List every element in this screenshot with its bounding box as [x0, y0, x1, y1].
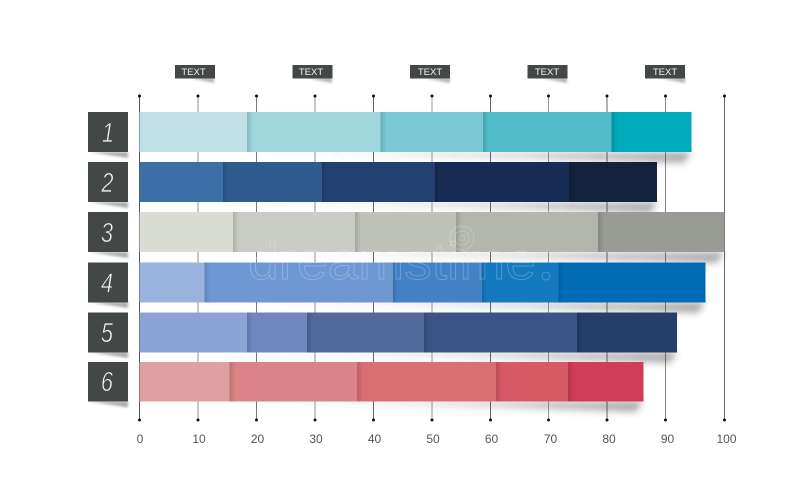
- bar row 3: [140, 212, 724, 252]
- x axis labels: 20: [251, 432, 264, 446]
- chart grid: axis lines and dots: [138, 94, 726, 422]
- x axis labels: 0: [137, 432, 144, 446]
- x axis labels: 30: [309, 432, 323, 446]
- x axis labels: 100: [716, 432, 737, 446]
- row number labels: 3: [101, 217, 113, 249]
- top tag labels: TEXT: [535, 67, 559, 78]
- bar row 4: [140, 262, 706, 302]
- row number labels: 1: [102, 117, 114, 149]
- top tag labels: [175, 65, 685, 83]
- x axis labels: 70: [544, 432, 557, 446]
- row number labels: [88, 112, 128, 408]
- x axis labels: 40: [368, 432, 381, 446]
- bar row 6: [140, 362, 644, 402]
- row number labels: 6: [101, 366, 113, 398]
- row number labels: 2: [101, 167, 114, 199]
- row number labels: 4: [101, 268, 113, 299]
- top tag labels: TEXT: [181, 67, 206, 78]
- x axis labels: 90: [661, 432, 674, 446]
- bar shadows: [250, 152, 724, 412]
- x axis labels: 50: [426, 432, 440, 446]
- x axis labels: 10: [192, 432, 206, 446]
- top tag labels: TEXT: [653, 67, 677, 78]
- bar row 1: [140, 112, 692, 152]
- row number labels: 5: [101, 317, 114, 349]
- x axis labels: 80: [602, 432, 616, 446]
- top tag labels: TEXT: [299, 67, 323, 78]
- x axis labels: [137, 432, 737, 446]
- x axis labels: 60: [485, 432, 498, 446]
- bar row 2: [140, 162, 657, 202]
- watermark: dreamstime: [248, 233, 536, 291]
- bar row 5: [140, 312, 677, 352]
- top tag labels: TEXT: [418, 67, 442, 78]
